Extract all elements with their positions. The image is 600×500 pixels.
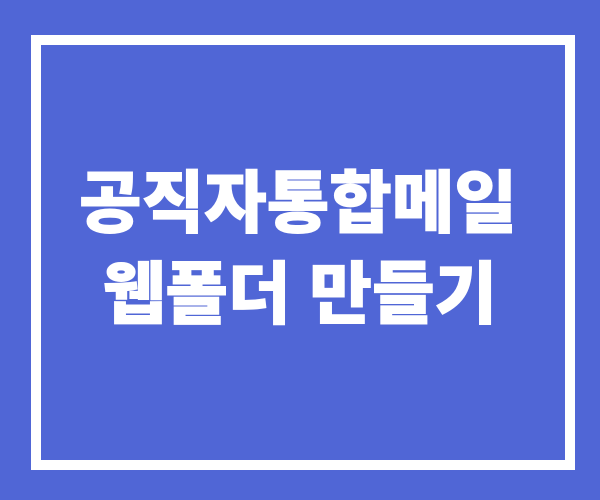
title line 2: 웹폴더 만들기 [103, 257, 497, 333]
white rectangular frame [31, 35, 575, 470]
title line 1: 공직자통합메일 [79, 166, 517, 242]
